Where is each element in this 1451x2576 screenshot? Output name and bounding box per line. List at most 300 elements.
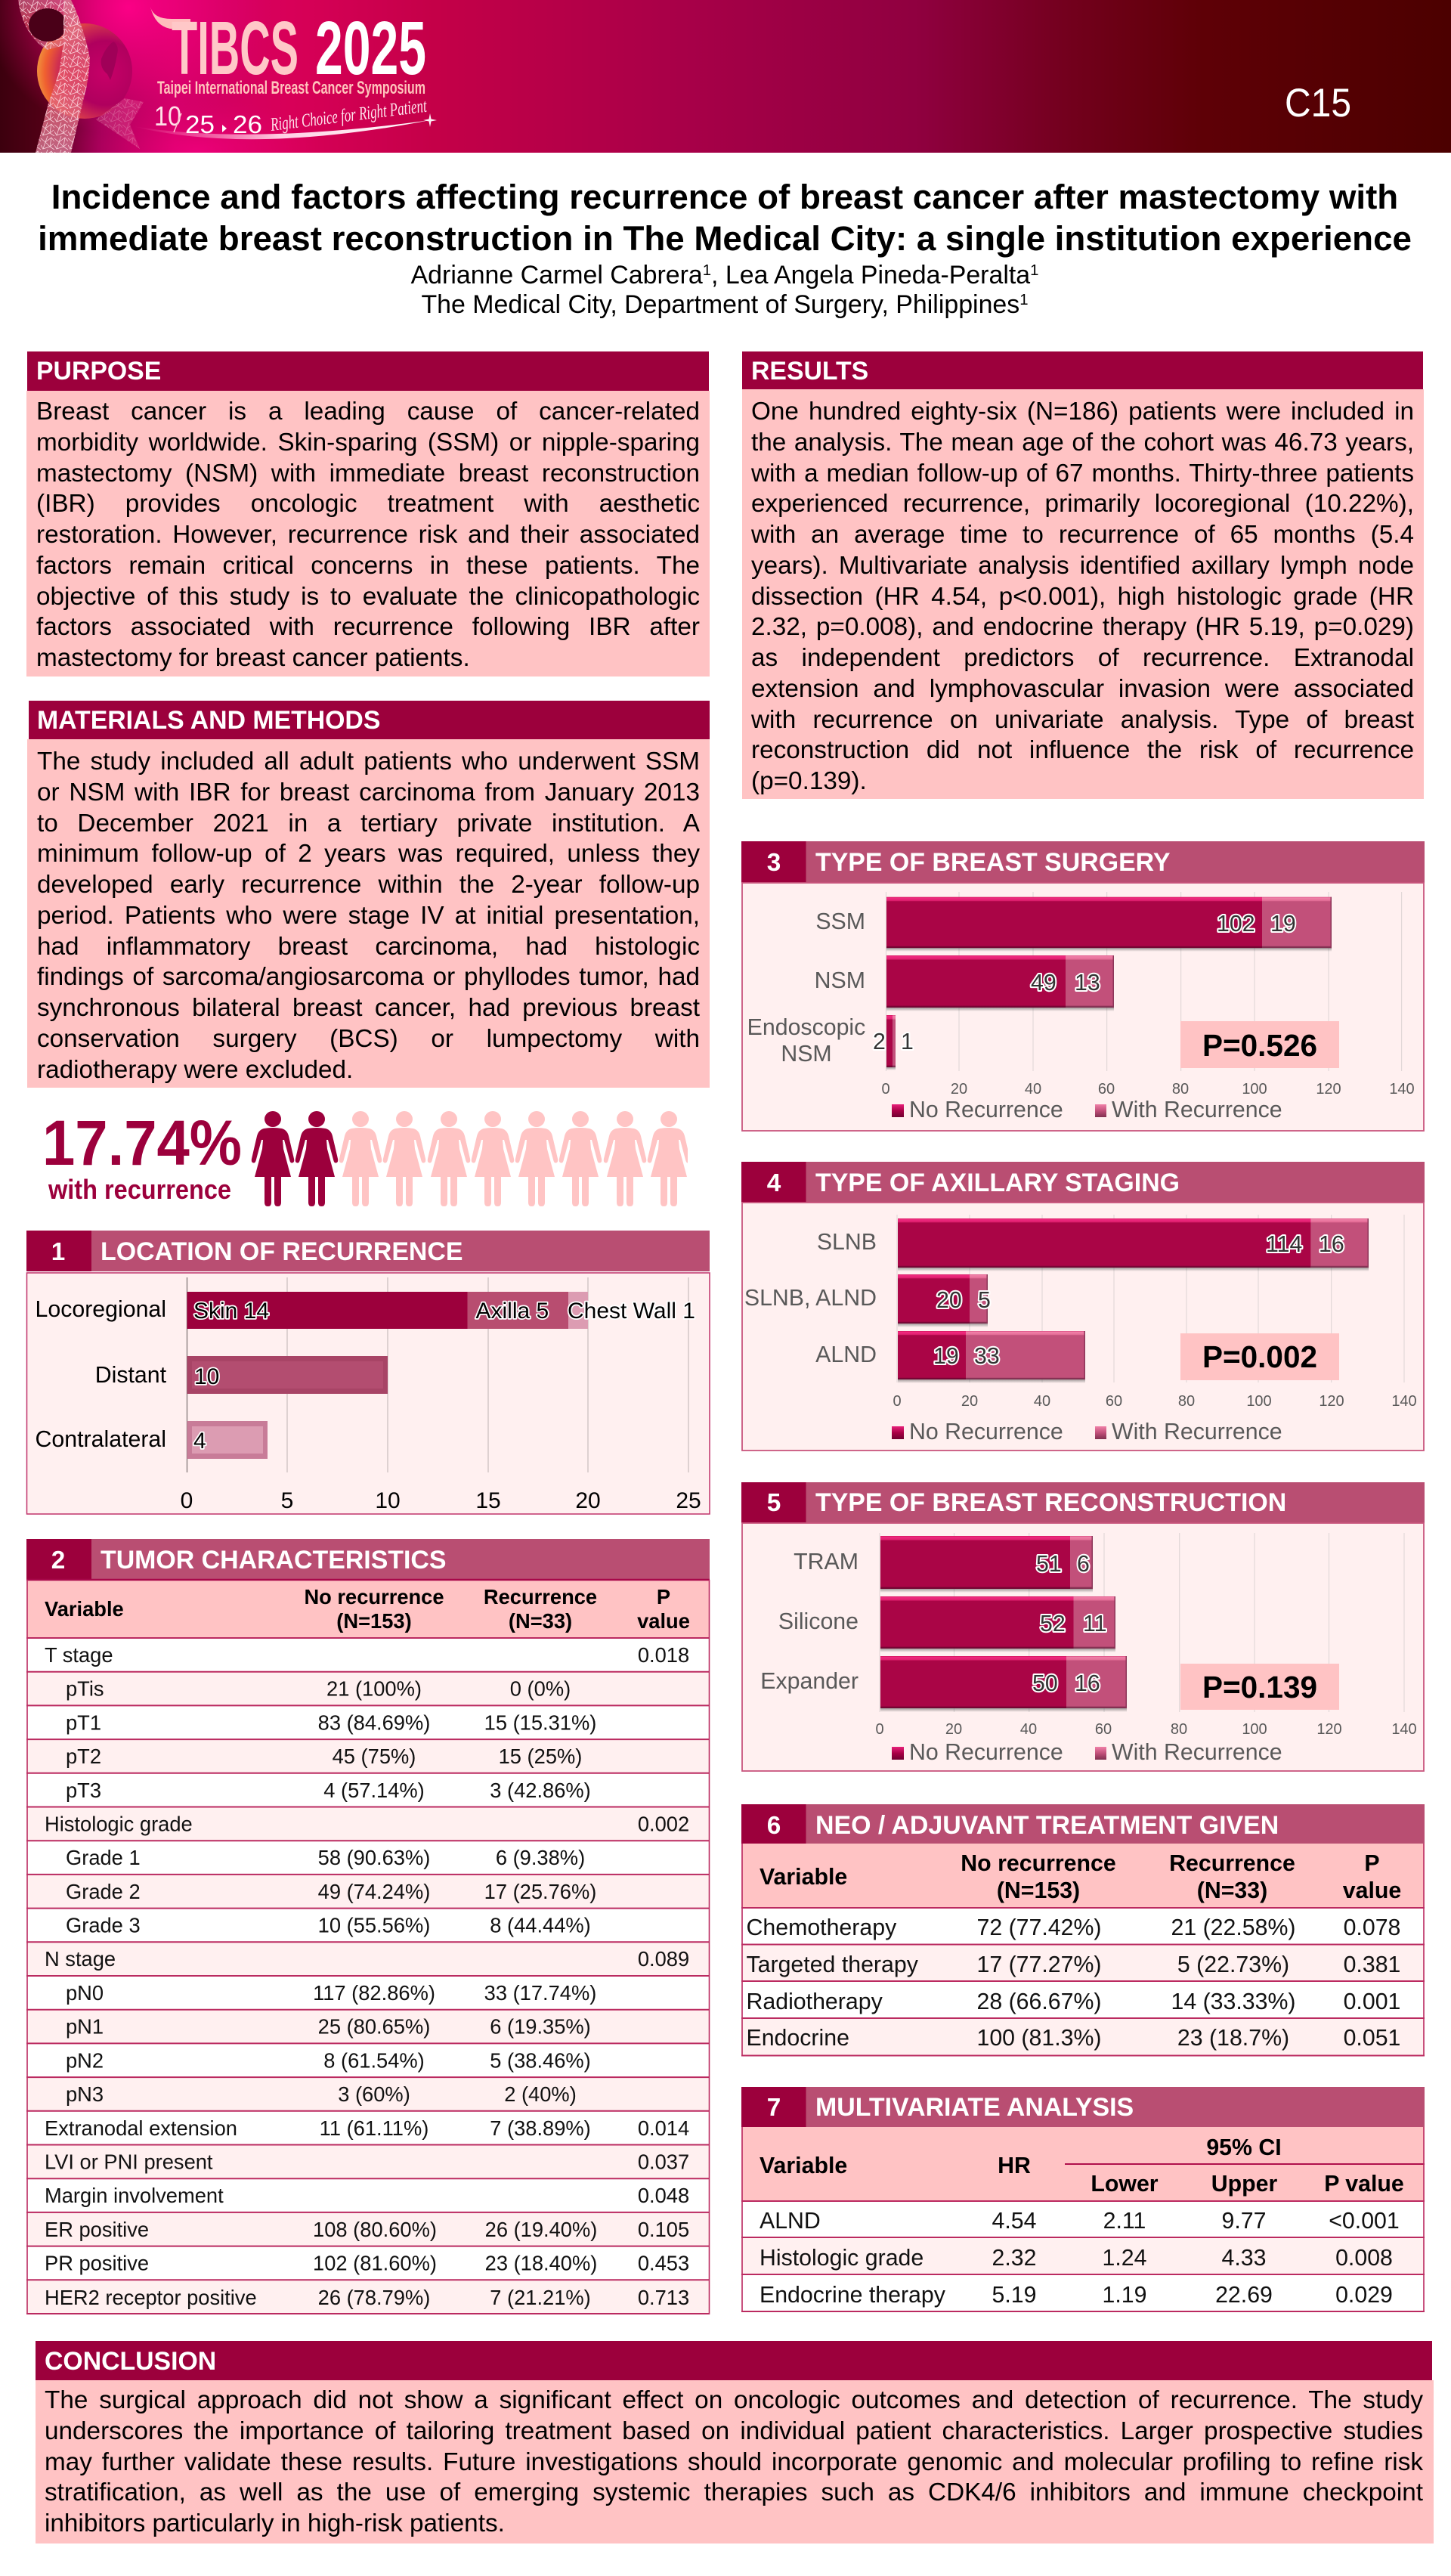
table header row: Lower xyxy=(1091,2172,1159,2197)
table header row: P xyxy=(657,1585,670,1608)
table body rows: 0.014 xyxy=(638,2116,689,2140)
legend: With Recurrence xyxy=(1112,1098,1282,1122)
x axis labels: 60 xyxy=(1098,1081,1115,1098)
legend: No Recurrence xyxy=(909,1098,1063,1122)
table body rows: 15 (25%) xyxy=(499,1745,582,1768)
table body rows: 17 (77.27%) xyxy=(976,1952,1102,1977)
bar: locoregional: Skin 14 xyxy=(193,1299,269,1324)
materials and methods text: developed early recurrence within the 2-year follow-up xyxy=(37,871,700,899)
table body rows: 10 (55.56%) xyxy=(318,1914,430,1937)
x axis labels xyxy=(181,1488,701,1513)
table body rows: 22.69 xyxy=(1215,2283,1273,2308)
table header row: Variable xyxy=(760,2153,847,2178)
horizontal stacked bar chart xyxy=(35,1277,701,1513)
conclusion text: inhibitors particularly in high-risk patients. xyxy=(45,2509,505,2537)
purpose text: morbidity worldwide. Skin-sparing (SSM) or nipple-sparing xyxy=(36,429,700,457)
x axis labels: 40 xyxy=(1034,1393,1050,1410)
results heading xyxy=(742,351,1423,389)
category labels: SLNB xyxy=(817,1230,877,1255)
materials and methods text: findings of sarcoma/angiosarcoma or phyllodes tumor, had xyxy=(37,963,700,991)
category labels xyxy=(744,1230,877,1367)
x axis labels: 100 xyxy=(1246,1393,1272,1410)
title: Incidence and factors affecting recurrence of breast cancer after mastectomy with xyxy=(51,178,1398,216)
x axis labels: 140 xyxy=(1391,1393,1417,1410)
results text: with a median follow-up of 67 months. Thirty-three patients xyxy=(751,460,1414,487)
table body rows: 0.453 xyxy=(638,2252,689,2275)
panel 4: type of axillary staging xyxy=(741,1162,1425,1451)
table body rows: 100 (81.3%) xyxy=(976,2026,1102,2051)
table body rows: 45 (75%) xyxy=(333,1745,416,1768)
panel 5: type of breast reconstruction xyxy=(741,1482,1425,1772)
x axis labels xyxy=(875,1721,1417,1738)
table header row: 95% CI xyxy=(1206,2135,1282,2160)
table body rows: Grade 2 xyxy=(66,1880,141,1903)
bar: TRAM: 6 xyxy=(1077,1552,1090,1577)
section header 1 xyxy=(26,1231,710,1271)
x axis labels: 0 xyxy=(881,1081,890,1098)
purpose text: objective of this study is to evaluate the clinicopathologic xyxy=(36,582,700,611)
table header row: Variable xyxy=(760,1865,847,1890)
section header 4: 4 xyxy=(767,1169,781,1197)
bar: Expander: 16 xyxy=(1075,1671,1100,1696)
table body rows: Histologic grade xyxy=(45,1813,193,1835)
results text xyxy=(742,389,1424,799)
purpose text: (IBR) provides oncologic treatment with aesthetic xyxy=(36,490,700,518)
bar: endoscopic NSM: 1 xyxy=(901,1029,914,1054)
x axis labels: 40 xyxy=(1025,1081,1041,1098)
results text: experienced recurrence, primarily locoregional (10.22%), xyxy=(751,490,1414,518)
table body rows: 0.381 xyxy=(1344,1952,1400,1977)
table body rows: pT1 xyxy=(66,1711,101,1734)
table body rows: 0.018 xyxy=(638,1643,689,1667)
table body rows: 21 (100%) xyxy=(326,1677,422,1701)
p value callout: P=0.526 xyxy=(1202,1028,1317,1063)
panel 2: tumor characteristics table xyxy=(26,1539,710,2314)
bar: TRAM: 51 xyxy=(1036,1552,1062,1577)
x axis labels xyxy=(893,1393,1417,1410)
bar: locoregional: Chest Wall 1 xyxy=(568,1299,695,1324)
purpose text: mastectomy (NSM) with immediate breast reconstruction xyxy=(36,460,700,487)
category labels: Silicone xyxy=(778,1609,859,1634)
table body rows: <0.001 xyxy=(1329,2209,1400,2234)
table body rows: 5 (22.73%) xyxy=(1177,1952,1289,1977)
bar: SSM: 19 xyxy=(1270,912,1296,937)
table body rows: 0.105 xyxy=(638,2218,689,2241)
table body rows: pN1 xyxy=(66,2015,104,2039)
category labels: SSM xyxy=(815,909,865,934)
table body rows: Chemotherapy xyxy=(747,1915,897,1940)
p value callout: P=0.139 xyxy=(1202,1670,1317,1704)
category labels: NSM xyxy=(781,1042,832,1067)
purpose text: Breast cancer is a leading cause of cancer-related xyxy=(36,398,700,426)
conclusion heading xyxy=(36,2341,1432,2380)
chart panel background xyxy=(742,1203,1424,1451)
table body rows: 26 (78.79%) xyxy=(318,2286,430,2309)
table header row: value xyxy=(637,1609,690,1633)
materials and methods heading: MATERIALS AND METHODS xyxy=(37,706,380,735)
logo: TIBCS 2025: TIBCS xyxy=(172,6,299,91)
x axis labels: 100 xyxy=(1242,1721,1267,1738)
table body rows: 3 (60%) xyxy=(338,2082,410,2106)
x axis labels: 140 xyxy=(1389,1081,1415,1098)
table header row: (N=153) xyxy=(997,1878,1080,1903)
section header 1: LOCATION OF RECURRENCE xyxy=(101,1237,463,1266)
section header 2 xyxy=(26,1539,710,1579)
conclusion text xyxy=(36,2380,1434,2543)
materials and methods text: conservation surgery (BCS) or lumpectomy with xyxy=(37,1025,700,1053)
materials and methods text: or NSM with IBR for breast carcinoma from January 2013 xyxy=(37,779,700,807)
table body rows: 5 (38.46%) xyxy=(490,2048,591,2072)
bar: TRAM xyxy=(880,1536,1093,1593)
bar: SSM xyxy=(886,897,1332,952)
purpose text xyxy=(26,391,710,677)
conclusion text: stratification, as well as the use of emerging systemic therapies such as CDK4/6 inhibitors and immune checkpoint xyxy=(45,2478,1423,2506)
table body rows: pN2 xyxy=(66,2048,104,2072)
bar: locoregional xyxy=(187,1292,695,1329)
section header 7 xyxy=(741,2087,1425,2127)
table body rows: 0.048 xyxy=(638,2184,689,2207)
x axis labels: 20 xyxy=(961,1393,978,1410)
table body rows: 4.54 xyxy=(992,2209,1036,2234)
table body rows: Margin involvement xyxy=(45,2184,224,2207)
table body rows: 1.19 xyxy=(1103,2283,1146,2308)
x axis labels: 60 xyxy=(1095,1721,1112,1738)
table body rows: 102 (81.60%) xyxy=(313,2252,437,2275)
legend xyxy=(892,1420,1282,1444)
section header 5 xyxy=(741,1482,1425,1523)
table body rows: 0.001 xyxy=(1344,1989,1400,2014)
table body rows: 4 (57.14%) xyxy=(323,1779,425,1802)
x axis labels: 140 xyxy=(1391,1721,1417,1738)
icon: breast cancer ribbon xyxy=(18,0,144,153)
conclusion heading: CONCLUSION xyxy=(45,2347,216,2376)
table body rows: 17 (25.76%) xyxy=(484,1880,596,1903)
category labels: Endoscopic xyxy=(747,1015,865,1040)
category labels: Contralateral xyxy=(36,1427,166,1452)
table body rows xyxy=(760,2209,1400,2308)
authors and affiliation: The Medical City, Department of Surgery, Philippines1 xyxy=(421,290,1029,319)
table body rows xyxy=(747,1915,1400,2051)
bar: Silicone: 11 xyxy=(1083,1612,1106,1636)
x axis labels: 0 xyxy=(893,1393,902,1410)
icon: globe xyxy=(37,23,132,119)
section header 6: NEO / ADJUVANT TREATMENT GIVEN xyxy=(815,1811,1279,1840)
table body rows: 0.037 xyxy=(638,2150,689,2174)
category labels xyxy=(760,1550,859,1694)
table body rows: pT3 xyxy=(66,1779,101,1802)
table body rows: pN3 xyxy=(66,2082,104,2106)
table body rows: 2.11 xyxy=(1103,2209,1146,2234)
logo: TIBCS 2025: Taipei International Breast Cancer Symposium xyxy=(157,78,425,98)
bar: SLNB, ALND: 5 xyxy=(978,1288,991,1313)
title: immediate breast reconstruction in The Medical City: a single institution experience xyxy=(38,219,1412,258)
table body rows: 0.713 xyxy=(638,2286,689,2309)
legend: No Recurrence xyxy=(909,1740,1063,1765)
poster code C15: C15 xyxy=(1285,81,1351,125)
materials and methods text: had inflammatory breast carcinoma, had histologic xyxy=(37,933,700,960)
bar: endoscopic NSM xyxy=(873,1015,914,1070)
table header row: Upper xyxy=(1211,2172,1277,2197)
table body rows: Extranodal extension xyxy=(45,2116,237,2140)
bar: distant: 10 xyxy=(194,1364,219,1389)
table header row: value xyxy=(1343,1878,1401,1903)
results text: with recurrence on univariate analysis. Type of breast xyxy=(751,706,1414,733)
table body rows: 0.078 xyxy=(1344,1915,1400,1940)
section header 7: 7 xyxy=(767,2094,781,2122)
table body rows: Endocrine therapy xyxy=(760,2283,946,2308)
table body rows: 28 (66.67%) xyxy=(976,1989,1102,2014)
table body rows: Targeted therapy xyxy=(747,1952,919,1977)
x axis labels: 120 xyxy=(1319,1393,1344,1410)
table header row: (N=153) xyxy=(336,1609,412,1633)
table header row xyxy=(26,1580,710,1638)
table body rows: 0.008 xyxy=(1335,2246,1393,2271)
panel 1: location of recurrence xyxy=(26,1231,710,1515)
table body rows: 5.19 xyxy=(992,2283,1036,2308)
table body rows xyxy=(45,1643,689,2309)
bar: SLNB, ALND xyxy=(898,1274,991,1327)
section header 3: TYPE OF BREAST SURGERY xyxy=(815,848,1171,877)
category labels: Distant xyxy=(95,1363,167,1388)
logo: TIBCS 2025: 26 xyxy=(233,110,262,138)
table body rows: Radiotherapy xyxy=(747,1989,883,2014)
bar: Silicone: 52 xyxy=(1040,1612,1066,1636)
panel 7: multivariate analysis table xyxy=(741,2087,1425,2312)
x axis labels: 20 xyxy=(575,1488,601,1513)
table body rows: pTis xyxy=(66,1677,104,1701)
purpose heading xyxy=(27,351,709,391)
materials and methods text: minimum follow-up of 2 years was required, unless they xyxy=(37,840,700,868)
bar: NSM xyxy=(886,955,1114,1011)
purpose text: factors remain critical concerns in these patients. The xyxy=(36,552,700,580)
legend xyxy=(892,1098,1282,1122)
logo: TIBCS 2025: Right Choice for Right Patient xyxy=(269,96,428,135)
table body rows: 23 (18.7%) xyxy=(1177,2026,1289,2051)
table body rows: 21 (22.58%) xyxy=(1171,1915,1296,1940)
materials and methods heading xyxy=(29,701,710,739)
x axis labels: 60 xyxy=(1106,1393,1122,1410)
legend: With Recurrence xyxy=(1112,1420,1282,1444)
table body rows: Grade 3 xyxy=(66,1914,141,1937)
table body rows: 4.33 xyxy=(1222,2246,1266,2271)
x axis labels: 120 xyxy=(1316,1721,1342,1738)
bar: Expander: 50 xyxy=(1032,1671,1058,1696)
table body rows: Grade 1 xyxy=(66,1846,141,1869)
table body rows: 6 (19.35%) xyxy=(490,2015,591,2039)
panel 3: type of breast surgery xyxy=(741,841,1425,1132)
table body rows: 1.24 xyxy=(1103,2246,1146,2271)
table body rows: 2.32 xyxy=(992,2246,1036,2271)
table header row: No recurrence xyxy=(961,1851,1116,1876)
table body rows: 26 (19.40%) xyxy=(485,2218,597,2241)
table body rows: 14 (33.33%) xyxy=(1171,1989,1296,2014)
panel: purpose xyxy=(26,351,710,677)
authors and affiliation: Adrianne Carmel Cabrera1, Lea Angela Pineda-Peralta1 xyxy=(411,261,1038,289)
purpose heading: PURPOSE xyxy=(36,357,161,385)
table header row: P xyxy=(1364,1851,1380,1876)
table body rows: 25 (80.65%) xyxy=(318,2015,430,2039)
bar: SLNB: 114 xyxy=(1266,1232,1302,1257)
results text: One hundred eighty-six (N=186) patients were included in xyxy=(751,398,1414,426)
x axis labels: 40 xyxy=(1020,1721,1037,1738)
x axis labels: 80 xyxy=(1172,1081,1189,1098)
bar: ALND: 33 xyxy=(974,1344,1000,1369)
results heading: RESULTS xyxy=(751,357,868,385)
category labels xyxy=(747,909,865,1067)
big percentage: 17.74% xyxy=(42,1107,242,1178)
authors and affiliation xyxy=(411,261,1038,319)
panel: results xyxy=(742,351,1424,799)
p value callout xyxy=(1180,1664,1339,1710)
bar: SLNB xyxy=(898,1218,1369,1271)
table body rows: pN0 xyxy=(66,1981,104,2005)
bar: ALND: 19 xyxy=(933,1344,959,1369)
bar: SSM: 102 xyxy=(1217,912,1255,937)
materials and methods text: to December 2021 in a tertiary private institution. A xyxy=(37,809,700,838)
section header 4: TYPE OF AXILLARY STAGING xyxy=(815,1169,1180,1197)
bar: Expander xyxy=(880,1656,1127,1712)
table header row: Recurrence xyxy=(1169,1851,1295,1876)
table body rows: 117 (82.86%) xyxy=(313,1981,435,2005)
table body rows: 58 (90.63%) xyxy=(318,1846,430,1869)
table body rows: 8 (44.44%) xyxy=(490,1914,591,1937)
chart panel background xyxy=(742,883,1424,1131)
results text: dissection (HR 4.54, p<0.001), high histologic grade (HR xyxy=(751,582,1414,611)
section header 3 xyxy=(741,841,1425,883)
bar: locoregional: Axilla 5 xyxy=(476,1299,549,1324)
materials and methods text: radiotherapy were excluded. xyxy=(37,1055,353,1084)
panel: conclusion xyxy=(36,2341,1434,2543)
section header 3: 3 xyxy=(767,849,781,877)
table body rows: 83 (84.69%) xyxy=(318,1711,430,1734)
table body rows: 9.77 xyxy=(1222,2209,1266,2234)
x axis labels: 25 xyxy=(676,1488,701,1513)
bar: NSM: 13 xyxy=(1075,971,1100,995)
table body rows: ALND xyxy=(760,2209,821,2234)
category labels: SLNB, ALND xyxy=(744,1286,877,1311)
bar: contralateral xyxy=(187,1421,268,1459)
table body rows: PR positive xyxy=(45,2252,149,2275)
panel 6: neo / adjuvant treatment table xyxy=(741,1804,1425,2056)
section header 5: TYPE OF BREAST RECONSTRUCTION xyxy=(815,1488,1286,1517)
conclusion text: may further validate these results. Future investigations should incorporate genomic and molecular profiling to refine risk xyxy=(45,2448,1423,2476)
table body rows: pT2 xyxy=(66,1745,101,1768)
table body rows: 33 (17.74%) xyxy=(484,1981,596,2005)
table body rows: 0.051 xyxy=(1344,2026,1400,2051)
category labels: ALND xyxy=(815,1342,877,1367)
bar: SLNB, ALND: 20 xyxy=(936,1288,962,1313)
table header row xyxy=(741,2127,1425,2201)
table body rows: Histologic grade xyxy=(760,2246,924,2271)
results text: with an average time to recurrence of 65 months (5.4 xyxy=(751,521,1414,549)
table header row: (N=33) xyxy=(509,1609,572,1633)
results text: extension and lymphovascular invasion were associated xyxy=(751,675,1414,703)
category labels: NSM xyxy=(815,968,865,993)
purpose text: factors associated with recurrence following IBR after xyxy=(36,613,700,641)
x axis labels: 0 xyxy=(875,1721,884,1738)
section header 6 xyxy=(741,1804,1425,1844)
section header 4 xyxy=(741,1162,1425,1203)
category labels: TRAM xyxy=(794,1550,859,1574)
section header 5: 5 xyxy=(767,1489,781,1517)
section header 1: 1 xyxy=(51,1238,65,1266)
p value callout xyxy=(1180,1021,1339,1068)
x axis labels: 120 xyxy=(1316,1081,1341,1098)
logo: TIBCS 2025 xyxy=(150,6,428,138)
results text: the analysis. The mean age of the cohort was 46.73 years, xyxy=(751,429,1414,457)
category labels: Locoregional xyxy=(35,1297,166,1322)
logo: TIBCS 2025: 25 xyxy=(185,110,215,138)
results text: 2.32, p=0.008), and endocrine therapy (HR 5.19, p=0.029) xyxy=(751,613,1414,641)
table body rows: N stage xyxy=(45,1947,116,1971)
icon: swoosh arc xyxy=(132,113,437,139)
bar: ALND xyxy=(898,1331,1085,1383)
logo: TIBCS 2025: 10 xyxy=(154,101,181,132)
table body rows: Endocrine xyxy=(747,2026,849,2051)
p value callout: P=0.002 xyxy=(1202,1339,1317,1374)
table body rows: 0.029 xyxy=(1335,2283,1393,2308)
section header 2: TUMOR CHARACTERISTICS xyxy=(101,1546,447,1574)
panel: materials and methods xyxy=(27,701,710,1088)
table body rows: 11 (61.11%) xyxy=(320,2116,428,2140)
table body rows: 0 (0%) xyxy=(510,1677,571,1701)
legend: With Recurrence xyxy=(1112,1740,1282,1765)
section header 2: 2 xyxy=(51,1547,65,1574)
table body rows: 108 (80.60%) xyxy=(313,2218,437,2241)
conclusion text: underscores the importance of tailoring treatment based on individual patient characteristics. Larger prospective studies xyxy=(45,2417,1423,2445)
table body rows: 23 (18.40%) xyxy=(485,2252,597,2275)
conclusion text: The surgical approach did not show a significant effect on oncologic outcomes and detection of recurrence. The study xyxy=(45,2386,1423,2414)
table body rows: T stage xyxy=(45,1643,113,1667)
table body rows: 6 (9.38%) xyxy=(496,1846,585,1869)
icon: ten women pictogram, two highlighted xyxy=(252,1111,690,1206)
table body rows: 15 (15.31%) xyxy=(484,1711,596,1734)
materials and methods text: period. Patients who were stage IV at initial presentation, xyxy=(37,902,700,930)
header banner xyxy=(0,0,1451,153)
legend xyxy=(892,1740,1282,1765)
logo: TIBCS 2025: 2025 xyxy=(315,6,426,91)
results text: (p=0.139). xyxy=(751,767,867,795)
results text: as independent predictors of recurrence. Extranodal xyxy=(751,644,1414,672)
x axis labels: 5 xyxy=(281,1488,293,1513)
bar: distant xyxy=(187,1356,388,1394)
table header row: No recurrence xyxy=(304,1585,444,1608)
table header row: HR xyxy=(998,2153,1031,2178)
table header row: P value xyxy=(1324,2172,1404,2197)
bar: SLNB: 16 xyxy=(1319,1232,1344,1257)
purpose text: restoration. However, recurrence risk and their associated xyxy=(36,521,700,549)
x axis labels: 15 xyxy=(475,1488,501,1513)
table body rows: 0.002 xyxy=(638,1813,689,1835)
materials and methods text: synchronous bilateral breast cancer, had previous breast xyxy=(37,994,700,1022)
x axis labels: 10 xyxy=(375,1488,401,1513)
legend: No Recurrence xyxy=(909,1420,1063,1444)
x axis labels: 20 xyxy=(945,1721,962,1738)
table body rows: 2 (40%) xyxy=(504,2082,577,2106)
table body rows: 8 (61.54%) xyxy=(323,2048,425,2072)
materials and methods text xyxy=(27,739,710,1088)
table body rows: 0.089 xyxy=(638,1947,689,1971)
with recurrence label: with recurrence xyxy=(48,1174,231,1205)
results text: years). Multivariate analysis identified axillary lymph node xyxy=(751,552,1414,580)
table header row: (N=33) xyxy=(1197,1878,1267,1903)
category labels xyxy=(35,1297,167,1452)
x axis labels: 20 xyxy=(951,1081,967,1098)
chart panel background xyxy=(27,1273,710,1514)
x axis labels: 80 xyxy=(1171,1721,1187,1738)
table body rows: HER2 receptor positive xyxy=(45,2286,257,2309)
section header 6: 6 xyxy=(767,1812,781,1840)
